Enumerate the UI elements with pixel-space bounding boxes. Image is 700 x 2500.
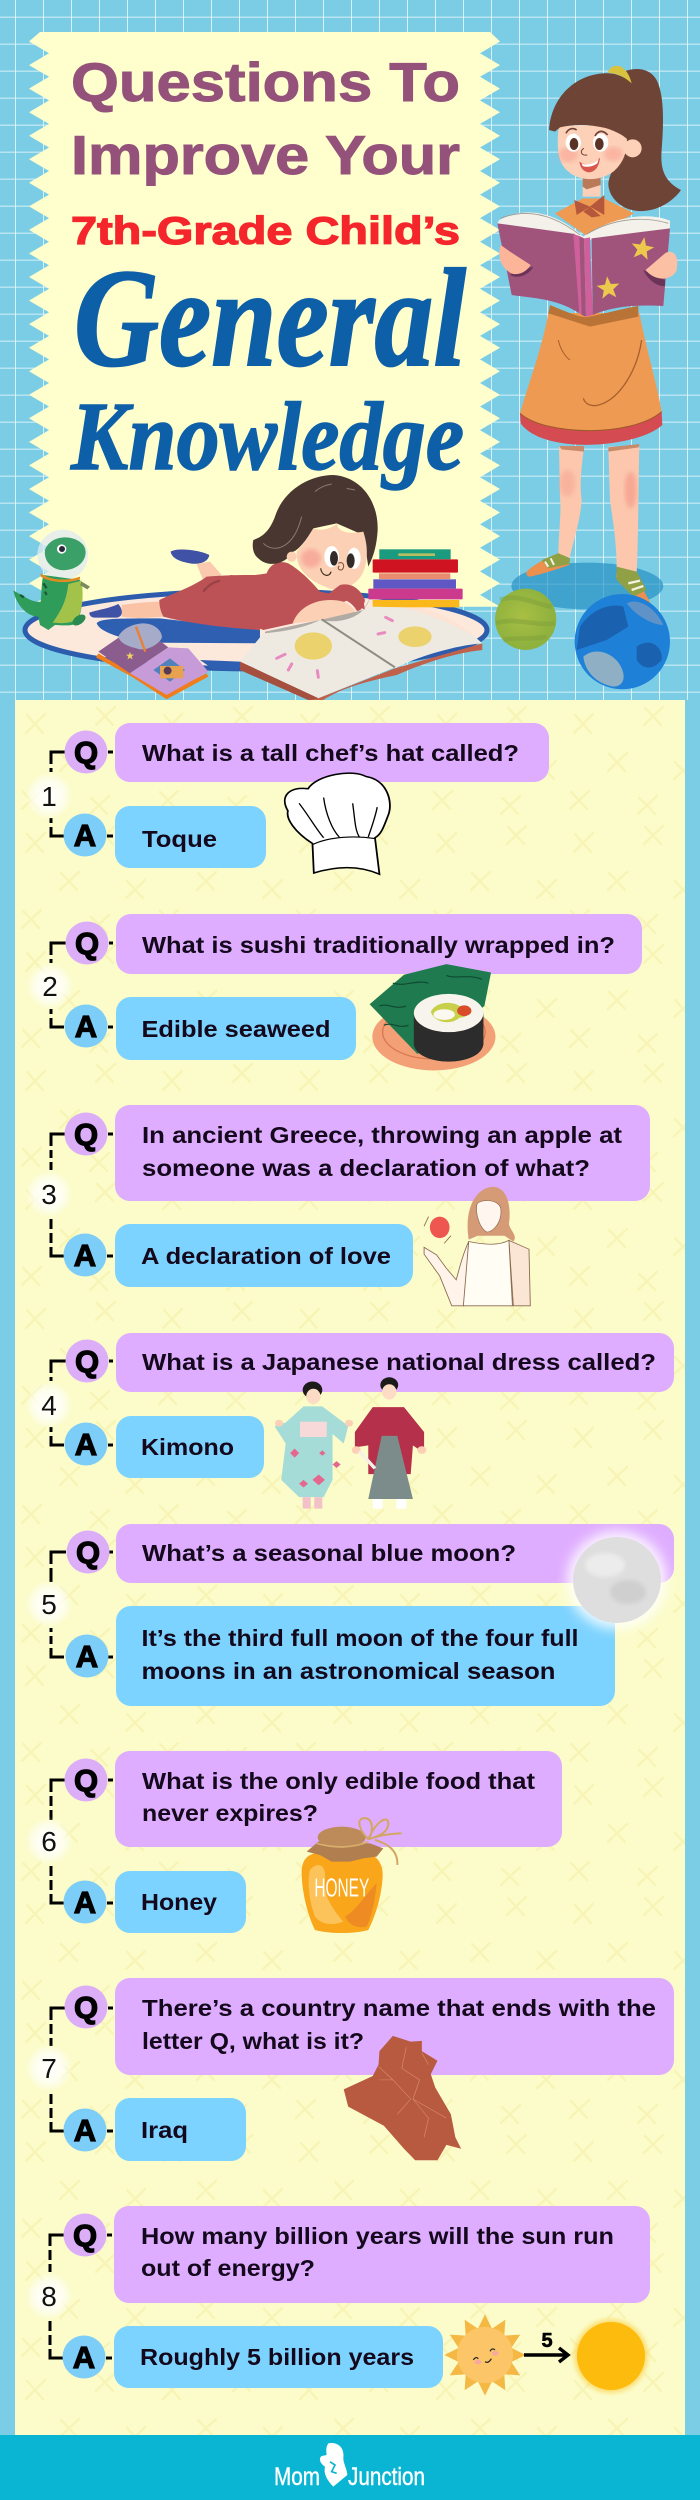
icon: sushi on seaweed — [370, 964, 496, 1070]
question 3: someone was a declaration of what? — [142, 1155, 590, 1181]
icon: full moon — [567, 1531, 667, 1629]
question 8: out of energy? — [141, 2255, 315, 2281]
icon: shrunken sun — [574, 2319, 648, 2393]
number 4 — [25, 1381, 73, 1429]
number 7 — [25, 2044, 73, 2092]
A badge 7: A — [74, 2113, 96, 2148]
Q badge 7: Q — [74, 1990, 98, 2025]
A badge 5 — [66, 1634, 108, 1678]
illustration: small space picture book — [96, 623, 208, 699]
A badge 3 — [64, 1234, 106, 1276]
question and answer 8 — [25, 2206, 650, 2396]
number 1: 1 — [41, 781, 57, 812]
question 6: What is the only edible food that — [142, 1768, 535, 1794]
Q badge 4 — [66, 1340, 108, 1382]
question 6: never expires? — [142, 1800, 318, 1826]
number 6 — [25, 1817, 73, 1865]
number 2 — [26, 962, 74, 1010]
icon: chef hat — [285, 773, 390, 874]
question and answer 4 — [25, 1333, 674, 1509]
question 2 — [116, 914, 642, 974]
connector 8 — [50, 2235, 112, 2358]
answer 6 — [115, 1871, 246, 1933]
A badge 1: A — [74, 818, 96, 853]
Q badge 2 — [66, 922, 108, 964]
number 8: 8 — [41, 2281, 57, 2312]
answer 1: Toque — [142, 826, 217, 852]
Q badge 2: Q — [75, 926, 99, 961]
A badge 1 — [64, 814, 106, 856]
A badge 6 — [64, 1880, 106, 1924]
number 4: 4 — [41, 1390, 57, 1421]
A badge 8: A — [73, 2340, 95, 2375]
connector 2 — [51, 943, 113, 1027]
number 5 — [25, 1580, 73, 1628]
connector 7 — [51, 2008, 113, 2131]
illustration: dinosaur in space helmet — [13, 530, 90, 630]
question 7: There’s a country name that ends with the — [142, 1995, 656, 2021]
question 5: What’s a seasonal blue moon? — [142, 1540, 516, 1566]
Q badge 1 — [64, 730, 108, 774]
Q badge 5 — [66, 1530, 110, 1574]
answer 8 — [114, 2326, 443, 2388]
title — [70, 51, 466, 491]
question 7 — [115, 1978, 674, 2075]
question and answer 5 — [25, 1524, 674, 1706]
Q badge 7 — [64, 1986, 108, 2028]
number 3 — [25, 1170, 73, 1218]
question 6 — [115, 1751, 562, 1847]
number 7: 7 — [41, 2053, 57, 2084]
question 8: How many billion years will the sun run — [141, 2223, 614, 2249]
number 6: 6 — [41, 1826, 57, 1857]
question and answer 3 — [25, 1105, 650, 1306]
Q badge 5: Q — [76, 1535, 100, 1570]
A badge 7 — [64, 2108, 106, 2152]
question and answer 1 — [25, 723, 549, 874]
title: Improve Your — [71, 124, 460, 186]
answer 2: Edible seaweed — [142, 1016, 330, 1042]
A badge 6: A — [74, 1885, 96, 1920]
A badge 8 — [62, 2336, 106, 2378]
A badge 3: A — [74, 1238, 96, 1273]
answer 2 — [116, 997, 356, 1060]
logo: MomJunction: Mom — [274, 2463, 320, 2491]
Q badge 1: Q — [74, 735, 98, 770]
arrow with label 5: 5 — [541, 2330, 553, 2352]
question and answer 7 — [25, 1978, 674, 2161]
connector 1 — [51, 752, 113, 836]
answer 5: moons in an astronomical season — [142, 1658, 556, 1684]
question 5 — [116, 1524, 674, 1583]
connector 5 — [51, 1552, 113, 1657]
Q badge 6: Q — [74, 1763, 98, 1798]
answer 4 — [116, 1416, 264, 1478]
question and answer 6 — [25, 1751, 562, 1933]
title: Questions To — [71, 51, 460, 113]
logo: MomJunction: Junction — [348, 2463, 425, 2491]
Q badge 3: Q — [74, 1117, 98, 1152]
connector 4 — [51, 1361, 113, 1445]
title: General — [74, 241, 466, 396]
icon: woman catching an apple — [424, 1187, 530, 1306]
A badge 2: A — [75, 1009, 97, 1044]
footer — [0, 2435, 700, 2500]
connector 6 — [51, 1780, 113, 1903]
illustration: child lying on the rug — [89, 475, 482, 700]
Q badge 8: Q — [73, 2218, 97, 2253]
answer 1 — [115, 806, 266, 868]
zigzag paper panel — [29, 32, 500, 607]
icon: couple in kimonos — [275, 1377, 426, 1509]
A badge 4: A — [75, 1427, 97, 1462]
icon: smiling sun — [444, 2314, 526, 2396]
answer 7 — [115, 2098, 246, 2161]
Q badge 3 — [64, 1112, 108, 1156]
icon: honey jar: HONEY — [314, 1873, 369, 1903]
question and answer 2 — [26, 914, 642, 1070]
question 1 — [115, 723, 549, 782]
answer 7: Iraq — [141, 2117, 188, 2143]
icon: honey jar — [302, 1818, 402, 1933]
A badge 4 — [64, 1422, 108, 1466]
question 4: What is a Japanese national dress called? — [142, 1349, 656, 1375]
Q badge 8 — [64, 2214, 106, 2256]
Q badge 6 — [64, 1758, 108, 1802]
number 1 — [25, 772, 73, 820]
illustration: standing girl reading a book — [495, 66, 681, 689]
illustration: rug — [25, 591, 487, 669]
number 3: 3 — [41, 1179, 57, 1210]
panel: questions and answers — [15, 700, 685, 2436]
question 8 — [114, 2206, 650, 2303]
answer 3: A declaration of love — [141, 1243, 391, 1269]
Q badge 4: Q — [75, 1344, 99, 1379]
answer 6: Honey — [141, 1889, 217, 1915]
question 1: What is a tall chef’s hat called? — [142, 740, 519, 766]
number 8 — [25, 2272, 73, 2320]
answer 8: Roughly 5 billion years — [140, 2344, 414, 2370]
A badge 5: A — [76, 1639, 98, 1674]
question 3 — [115, 1105, 650, 1201]
number 2: 2 — [42, 971, 58, 1002]
question 2: What is sushi traditionally wrapped in? — [142, 932, 615, 958]
number 5: 5 — [41, 1589, 57, 1620]
title: 7th-Grade Child’s — [71, 210, 460, 253]
answer 4: Kimono — [141, 1434, 234, 1460]
answer 5: It’s the third full moon of the four full — [142, 1625, 578, 1651]
question 3: In ancient Greece, throwing an apple at — [142, 1122, 622, 1148]
illustration: stack of books — [368, 549, 463, 607]
logo: MomJunction — [274, 2443, 425, 2491]
connector 3 — [51, 1134, 113, 1256]
question 7: letter Q, what is it? — [142, 2028, 364, 2054]
answer 3 — [115, 1224, 413, 1287]
answer 5 — [116, 1606, 615, 1706]
title: Knowledge — [70, 383, 464, 491]
question 4 — [116, 1333, 674, 1392]
icon: map of Iraq — [344, 2036, 461, 2160]
arrow with label 5 — [524, 2330, 568, 2362]
A badge 2 — [64, 1004, 108, 1048]
